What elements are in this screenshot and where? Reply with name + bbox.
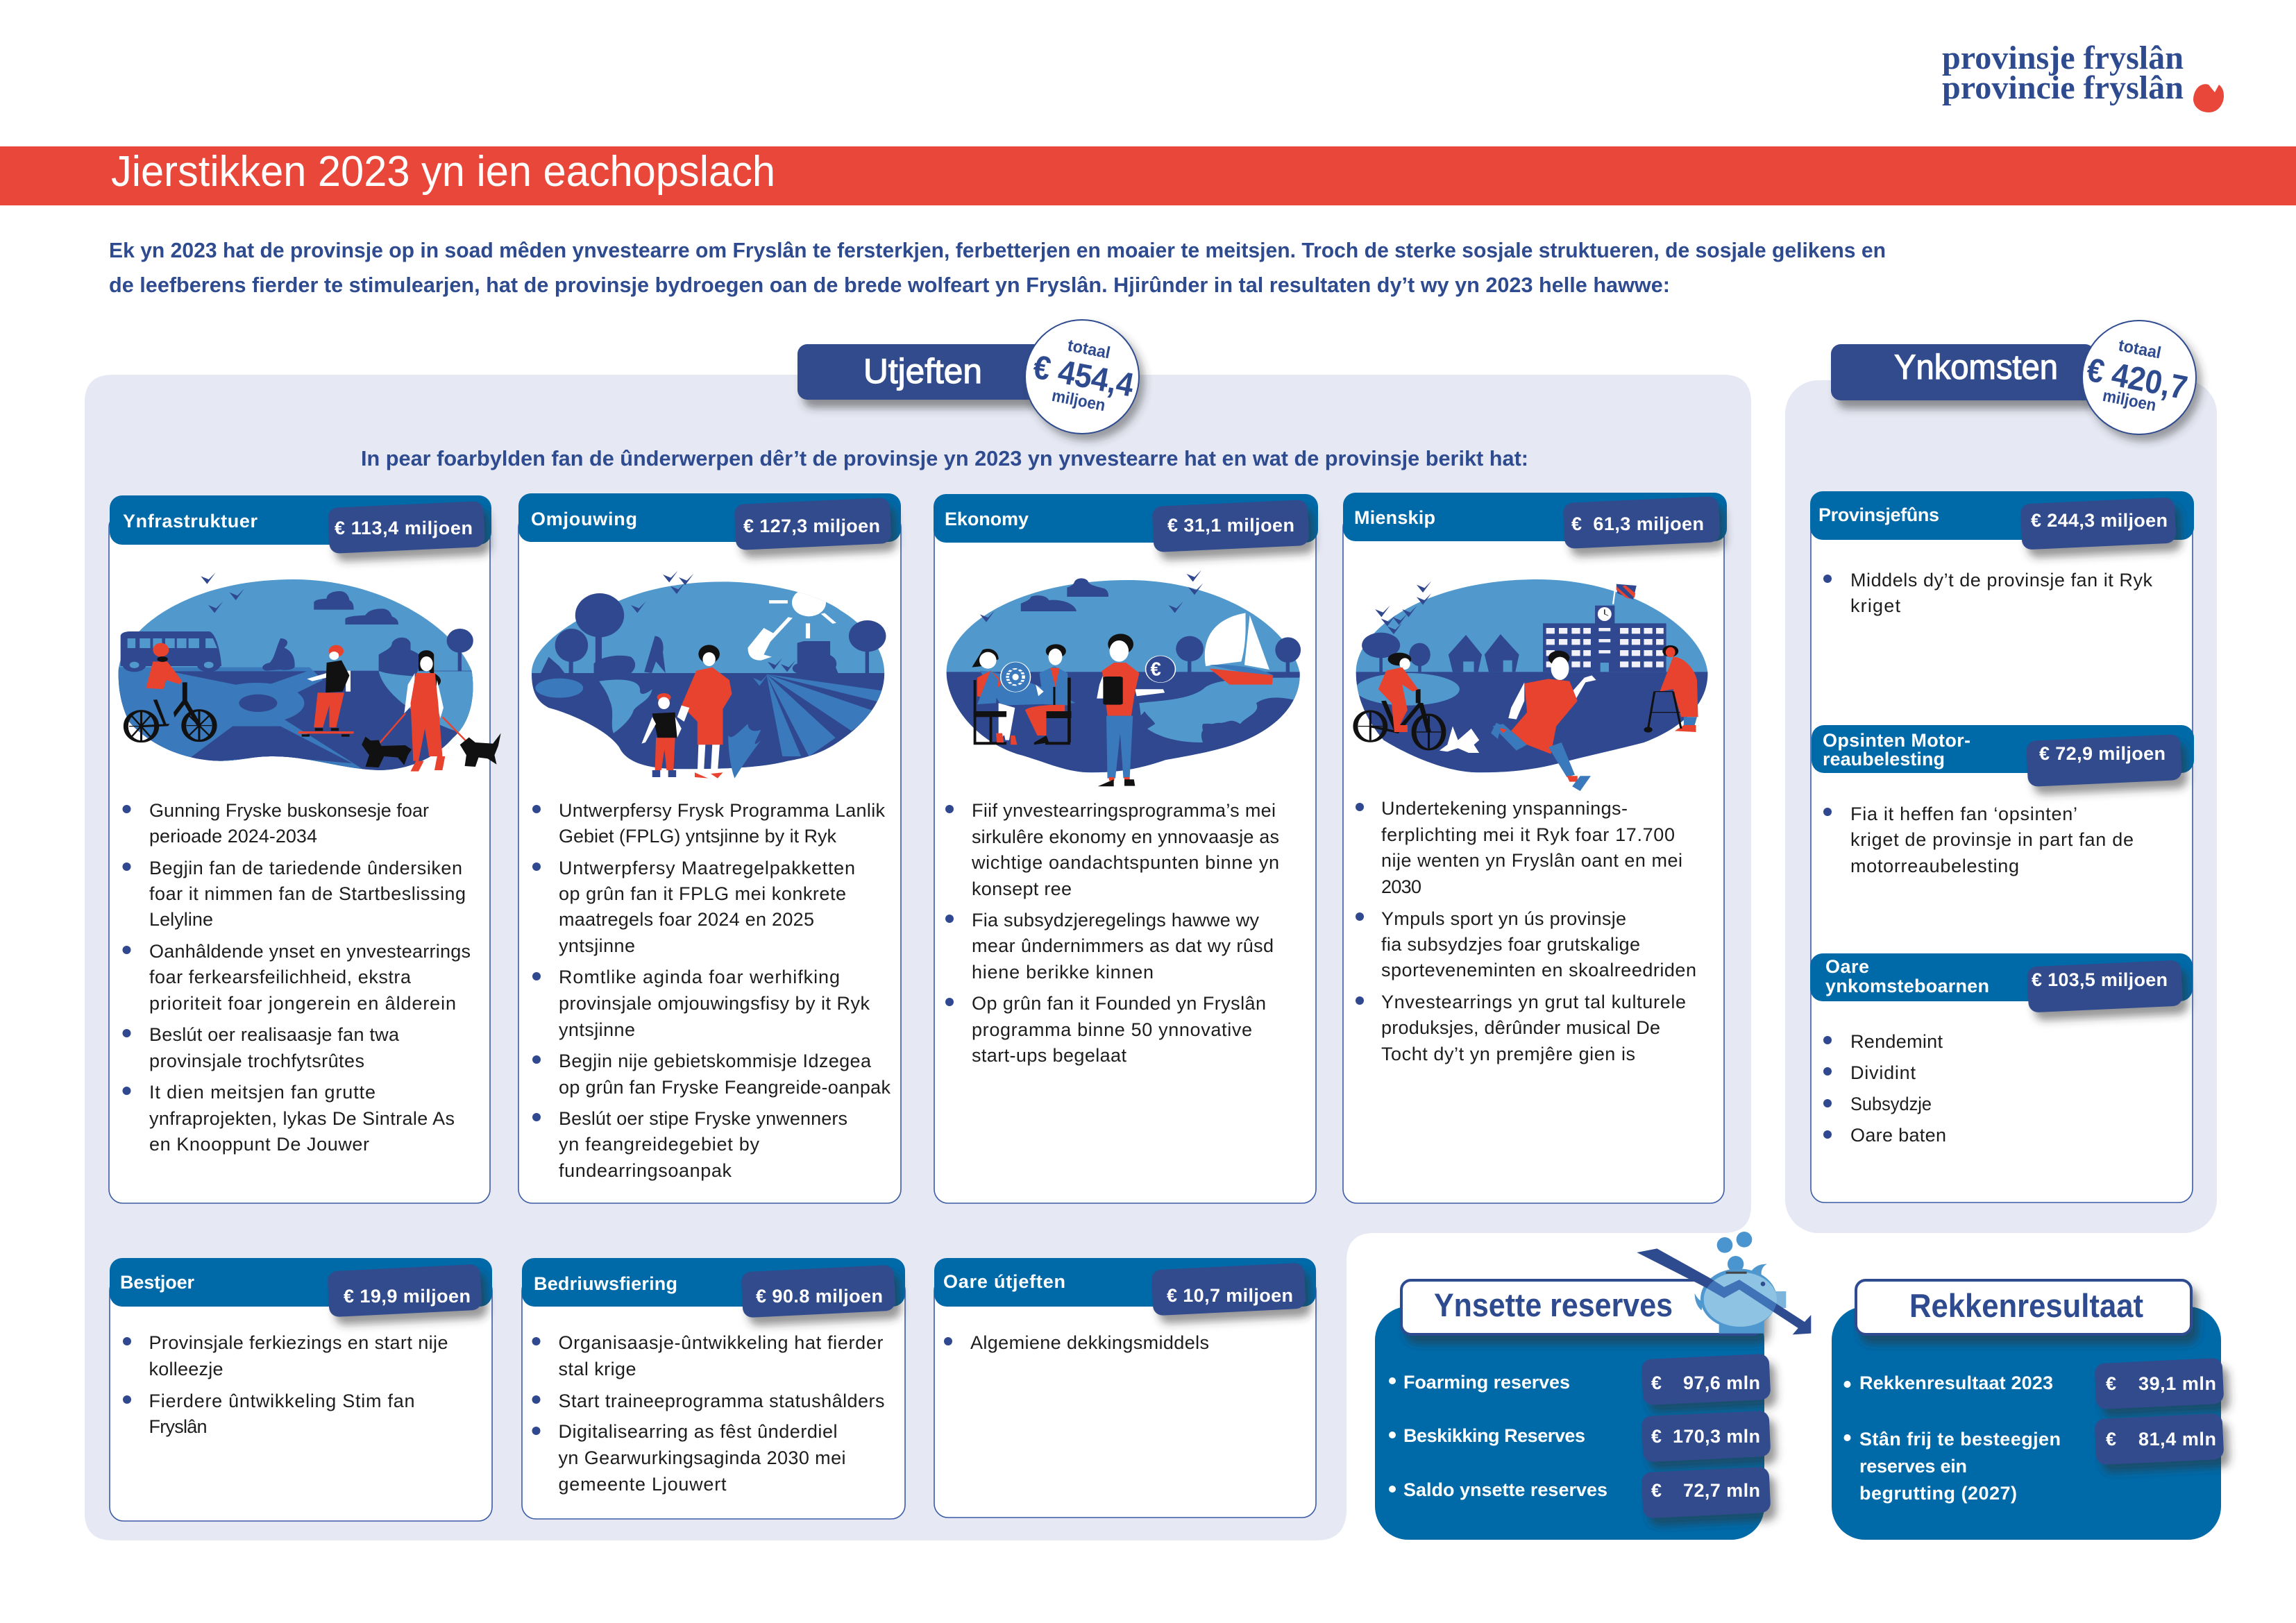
total circle: ynkomsten: € 420,7: [2084, 352, 2191, 407]
text: Oare ynkomsteboarnen: [1823, 1031, 1946, 1146]
bullet list: [945, 800, 1279, 1066]
bullet list: [1356, 798, 1696, 1064]
header: Provinsjefuns: [1810, 491, 2194, 540]
amount badge: stan frij: €: [2106, 1429, 2116, 1450]
amount badge: rekkenresultaat: 39,1 mln: [2138, 1373, 2216, 1394]
text: Oare ynkomsteboarnen: Oare baten: [1850, 1125, 1946, 1146]
card header: [518, 493, 901, 542]
rows: Rekkenresultaat 2023: [1859, 1373, 2053, 1393]
bullet list: Algemiene dekkingsmiddels: [970, 1332, 1209, 1353]
text: Opsinten: kriget de provinsje in part fan de: [1850, 829, 2134, 850]
header: Oare ynkomsteboarnen: [1810, 953, 2193, 1001]
bullet list: Lelyline: [149, 909, 213, 930]
logo: provinsje fryslan: [1942, 40, 2224, 112]
amount badge: stan frij: 81,4 mln: [2138, 1429, 2216, 1450]
bullet list: Digitalisearring as fêst ûnderdiel: [558, 1421, 837, 1442]
illustration: mobility: [118, 572, 501, 772]
amount badge: [2027, 960, 2183, 1013]
dog: [1440, 726, 1479, 753]
bullet list: foar it nimmen fan de Startbeslissing: [149, 883, 466, 904]
bullet list: Romtlike aginda foar werhifking: [559, 967, 840, 987]
card header: Omjouwing: [531, 509, 637, 529]
text: Oare ynkomsteboarnen: Dividint: [1850, 1062, 1916, 1083]
amount badge: [328, 1264, 482, 1317]
intro text: Ek yn 2023 hat de provinsje op in soad mêden ynvestearre om Fryslân te fersterkjen, ferbetterjen en moaier te meitsjen. Troch de sterke sosjale struktueren, de sosjale gelikens en: [109, 238, 1886, 262]
bullet list: Tocht dy’t yn premjêre gien is: [1381, 1044, 1635, 1064]
card: Oare utjeften: [934, 1258, 1316, 1518]
total circle: utjeften: € 454,4: [1030, 349, 1137, 404]
bullet list: ynfraprojekten, lykas De Sintrale As: [149, 1108, 455, 1129]
cyclist: [1356, 689, 1444, 749]
bullet list: Begjin nije gebietskommisje Idzegea: [559, 1051, 872, 1071]
bullet list: Oanhâldende ynset en ynvestearrings: [149, 941, 471, 962]
heading: Utjeften: [797, 344, 1068, 400]
bullet list: Op grûn fan it Founded yn Fryslân: [972, 993, 1266, 1014]
bullet list: maatregels foar 2024 en 2025: [559, 909, 814, 930]
bullet list: Provinsjale ferkiezings en start nije: [149, 1332, 448, 1353]
amount badge: € 72,9 miljoen: [2039, 743, 2166, 764]
bullet list: yntsjinne: [559, 1019, 635, 1040]
title band: Jierstikken 2023 yn ien eachopslach: [111, 148, 775, 196]
bullet list: yntsjinne: [559, 935, 635, 956]
intro text: [109, 238, 1886, 297]
bullet list: Gebiet (FPLG) yntsjinne by it Ryk: [559, 826, 837, 847]
bullet list: op grûn fan Fryske Feangreide-oanpak: [559, 1077, 891, 1098]
logo: provinsje fryslan: provinsje fryslân: [1942, 40, 2184, 76]
amount badge: stan frij: [2095, 1413, 2224, 1465]
logo: provinsje fryslan: provincie fryslân: [1942, 69, 2184, 106]
text: Provinsjefuns: Middels dy’t de provinsje fan it Ryk: [1850, 570, 2153, 590]
text: Provinsjefuns: kriget: [1850, 595, 1900, 616]
bullet list: produksjes, dêrûnder musical De: [1381, 1017, 1660, 1038]
amount badge: € 61,3 miljoen: [1571, 513, 1704, 534]
total circle: utjeften: totaal: [1066, 336, 1112, 363]
bullet list: Fryslân: [149, 1416, 207, 1437]
text: Oare ynkomsteboarnen: Rendemint: [1850, 1031, 1943, 1052]
bullet list: start-ups begelaat: [972, 1045, 1126, 1066]
bullet list: [122, 800, 471, 1155]
bullet list: fundearringsoanpak: [559, 1160, 732, 1181]
text: Opsinten: Fia it heffen fan ‘opsinten’: [1850, 804, 2077, 824]
total circle: ynkomsten: miljoen: [2101, 386, 2158, 415]
title box: [1856, 1280, 2191, 1334]
card header: Ynfrastruktuer: [123, 511, 258, 532]
illustration: economy: [938, 570, 1309, 786]
bullet list: provinsjale trochfytsrûtes: [149, 1051, 364, 1071]
bullet list: Beslút oer realisaasje fan twa: [149, 1024, 400, 1045]
amount badge: [328, 501, 485, 554]
card header: Bestjoer: [120, 1272, 194, 1293]
bullet list: It dien meitsjen fan grutte: [149, 1082, 375, 1103]
subheading: In pear foarbylden fan de ûnderwerpen dêr’t de provinsje yn 2023 yn ynvestearre hat en wat de provinsje berikt hat:: [361, 446, 1528, 470]
bullet list: nije wenten yn Fryslân oant en mei: [1381, 850, 1682, 871]
bullet list: konsept ree: [972, 878, 1072, 899]
icon: piggy bank with falling arrow: [1637, 1232, 1811, 1334]
amount badge: beskikking: €: [1651, 1426, 1662, 1447]
rows: reserves ein: [1859, 1456, 1967, 1477]
header: Oare ynkomsteboarnen: ynkomsteboarnen: [1825, 976, 1989, 996]
text: Provinsjefuns: [1823, 570, 2153, 616]
cyclist: [126, 682, 214, 742]
card header: [522, 1258, 905, 1307]
bullet list: Ynvestearrings yn grut tal kulturele: [1381, 992, 1686, 1012]
amount badge: € 244,3 miljoen: [2031, 510, 2168, 531]
total circle: ynkomsten: [2082, 321, 2196, 434]
bullet list: [532, 1332, 884, 1495]
amount badge: foarming: 97,6 mln: [1683, 1373, 1760, 1393]
amount badge: € 127,3 miljoen: [743, 516, 880, 536]
person with walker: [1662, 645, 1678, 657]
bullet list: wichtige oandachtspunten binne yn: [971, 852, 1279, 873]
bullet list: Ympuls sport yn ús provinsje: [1381, 908, 1626, 929]
text: Opsinten: motorreaubelesting: [1850, 856, 2019, 876]
amount badge: beskikking: 170,3 mln: [1673, 1426, 1760, 1447]
card header: [934, 1258, 1316, 1307]
bullet list: stal krige: [558, 1359, 636, 1379]
bullet list: en Knooppunt De Jouwer: [149, 1134, 369, 1155]
amount badge: saldo: €: [1651, 1480, 1662, 1501]
bullet list: yn feangreidegebiet by: [559, 1134, 759, 1155]
text: Opsinten: [1823, 804, 2134, 876]
amount badge: saldo: 72,7 mln: [1683, 1480, 1760, 1501]
amount badge: € 90.8 miljoen: [756, 1286, 883, 1307]
panel: Ynsette reserves: [1375, 1232, 1811, 1540]
amount badge: rekkenresultaat: [2095, 1358, 2224, 1409]
amount badge: [1151, 1263, 1306, 1316]
amount badge: € 103,5 miljoen: [2032, 969, 2168, 990]
heading: Utjeften: Utjeften: [863, 352, 982, 391]
illustration: community: [1347, 579, 1719, 791]
bullet list: ferplichting mei it Ryk foar 17.700: [1381, 824, 1675, 845]
card: Bestjoer: [110, 1258, 492, 1521]
seated people: [972, 649, 999, 668]
header: Provinsjefuns: Provinsjefûns: [1818, 504, 1939, 525]
illustration: environment: [522, 571, 904, 779]
total circle: utjeften: [1025, 320, 1139, 434]
header: Opsinten Motorreaubelesting: reaubelesting: [1823, 749, 1945, 770]
bullet list: Untwerpfersy Frysk Programma Lanlik: [559, 800, 886, 821]
rows: Stân frij te besteegjen: [1859, 1429, 2061, 1450]
bullet list: foar ferkearsfeilichheid, ekstra: [149, 967, 412, 987]
bullet list: prioriteit foar jongerein en âlderein: [149, 993, 456, 1014]
bullet list: provinsjale omjouwingsfisy by it Ryk: [559, 993, 870, 1014]
amount badge: [1152, 500, 1309, 552]
card header: [1343, 493, 1727, 541]
skateboarder: [329, 645, 344, 657]
bullet list: 2030: [1381, 876, 1421, 897]
heading: Ynkomsten: Ynkomsten: [1894, 348, 2058, 386]
header: Oare ynkomsteboarnen: Oare: [1825, 956, 1869, 977]
rows: Saldo ynsette reserves: [1403, 1479, 1607, 1500]
bullet list: Organisaasje-ûntwikkeling hat fierder: [558, 1332, 883, 1353]
amount badge: € 113,4 miljoen: [335, 518, 473, 538]
amount badge: beskikking: [1641, 1411, 1771, 1462]
amount badge: foarming: €: [1651, 1373, 1662, 1393]
heading: Ynkomsten: [1831, 344, 2095, 400]
bullet list: Fia subsydzjeregelings hawwe wy: [972, 910, 1259, 931]
bullet list: programma binne 50 ynnovative: [972, 1019, 1252, 1040]
amount badge: foarming: [1641, 1354, 1771, 1405]
bullet list: [123, 1332, 448, 1437]
card header: [110, 1258, 492, 1307]
panel: utjeften background: [85, 375, 1751, 1540]
card: Ekonomy: [934, 494, 1318, 1203]
bullet list: Start traineeprogramma statushâlders: [558, 1391, 884, 1411]
amount badge: [2020, 497, 2176, 550]
card: Bedriuwsfiering: [522, 1258, 905, 1519]
bullet list: gemeente Ljouwert: [558, 1474, 727, 1495]
amount badge: rekkenresultaat: €: [2106, 1373, 2116, 1394]
card: ynkomsten list: [1810, 491, 2194, 1203]
total circle: utjeften: miljoen: [1050, 386, 1107, 415]
card header: [934, 494, 1318, 543]
intro text: de leefberens fierder te stimulearjen, hat de provinsje bydroegen oan de brede wolfeart yn Fryslân. Hjirûnder in tal resultaten dy’t wy yn 2023 helle hawwe:: [109, 273, 1670, 297]
amount badge: [2026, 734, 2182, 787]
total circle: ynkomsten: totaal: [2117, 336, 2163, 363]
bullet list: sporteveneminten en skoalreedriden: [1381, 960, 1696, 980]
rows: Foarming reserves: [1403, 1372, 1570, 1393]
card: Mienskip: [1343, 493, 1727, 1203]
bullet list: yn Gearwurkingsaginda 2030 mei: [558, 1447, 845, 1468]
title box: Ynsette reserves: [1434, 1286, 1673, 1323]
illustration: economy: €: [1150, 658, 1161, 680]
card header: [110, 495, 491, 545]
rows: Beskikking Reserves: [1403, 1425, 1585, 1446]
bullet list: kolleezje: [149, 1359, 223, 1379]
bullet list: Beslút oer stipe Fryske ynwenners: [559, 1108, 847, 1129]
amount badge: [741, 1265, 895, 1318]
woman with dogs: [419, 650, 441, 687]
title box: Rekkenresultaat: [1909, 1287, 2143, 1324]
bullet list: mear ûndernimmers as dat wy rûsd: [972, 935, 1274, 956]
title box: [1401, 1280, 1762, 1334]
amount badge: € 19,9 miljoen: [344, 1286, 471, 1307]
bullet list: sirkulêre ekonomy en ynnovaasje as: [972, 826, 1279, 847]
bullet list: Undertekening ynspannings-: [1381, 798, 1628, 819]
amount badge: saldo: [1641, 1467, 1771, 1518]
bullet list: [532, 800, 891, 1181]
amount badge: € 31,1 miljoen: [1167, 515, 1294, 536]
amount badge: [734, 498, 891, 550]
card: Omjouwing: [518, 493, 904, 1203]
card header: Ekonomy: [945, 509, 1029, 529]
card: Ynfrastruktuer: [97, 495, 522, 1203]
rows: [1389, 1372, 1607, 1500]
text: Oare ynkomsteboarnen: Subsydzje: [1850, 1094, 1932, 1114]
header: Opsinten Motorreaubelesting: [1812, 725, 2194, 773]
bullet list: fia subsydzjes foar grutskalige: [1381, 934, 1640, 955]
card header: Oare útjeften: [943, 1271, 1065, 1292]
panel: ynkomsten background: [1785, 380, 2217, 1233]
rows: [1843, 1373, 2061, 1504]
bullet list: Fierdere ûntwikkeling Stim fan: [149, 1391, 415, 1411]
header: Opsinten Motorreaubelesting: Opsinten Motor-: [1823, 730, 1970, 751]
amount badge: [1563, 496, 1720, 549]
bullet list: Begjin fan de tariedende ûndersiken: [149, 858, 462, 878]
card header: Mienskip: [1354, 507, 1435, 528]
runner: [1548, 651, 1569, 665]
card header: Bedriuwsfiering: [534, 1273, 677, 1294]
panel: Rekkenresultaat: [1832, 1280, 2224, 1540]
amount badge: € 10,7 miljoen: [1167, 1285, 1293, 1306]
bullet list: perioade 2024-2034: [149, 826, 317, 847]
title band: [0, 146, 2296, 205]
rows: begrutting (2027): [1859, 1483, 2017, 1504]
bullet list: Fiif ynvestearringsprogramma’s mei: [972, 800, 1276, 821]
bullet list: Untwerpfersy Maatregelpakketten: [559, 858, 855, 878]
bullet list: op grûn fan it FPLG mei konkrete: [559, 883, 846, 904]
woman and child: [698, 645, 720, 663]
standing man: [1108, 634, 1133, 654]
bullet list: Gunning Fryske buskonsesje foar: [149, 800, 429, 821]
bullet list: hiene berikke kinnen: [972, 962, 1154, 983]
